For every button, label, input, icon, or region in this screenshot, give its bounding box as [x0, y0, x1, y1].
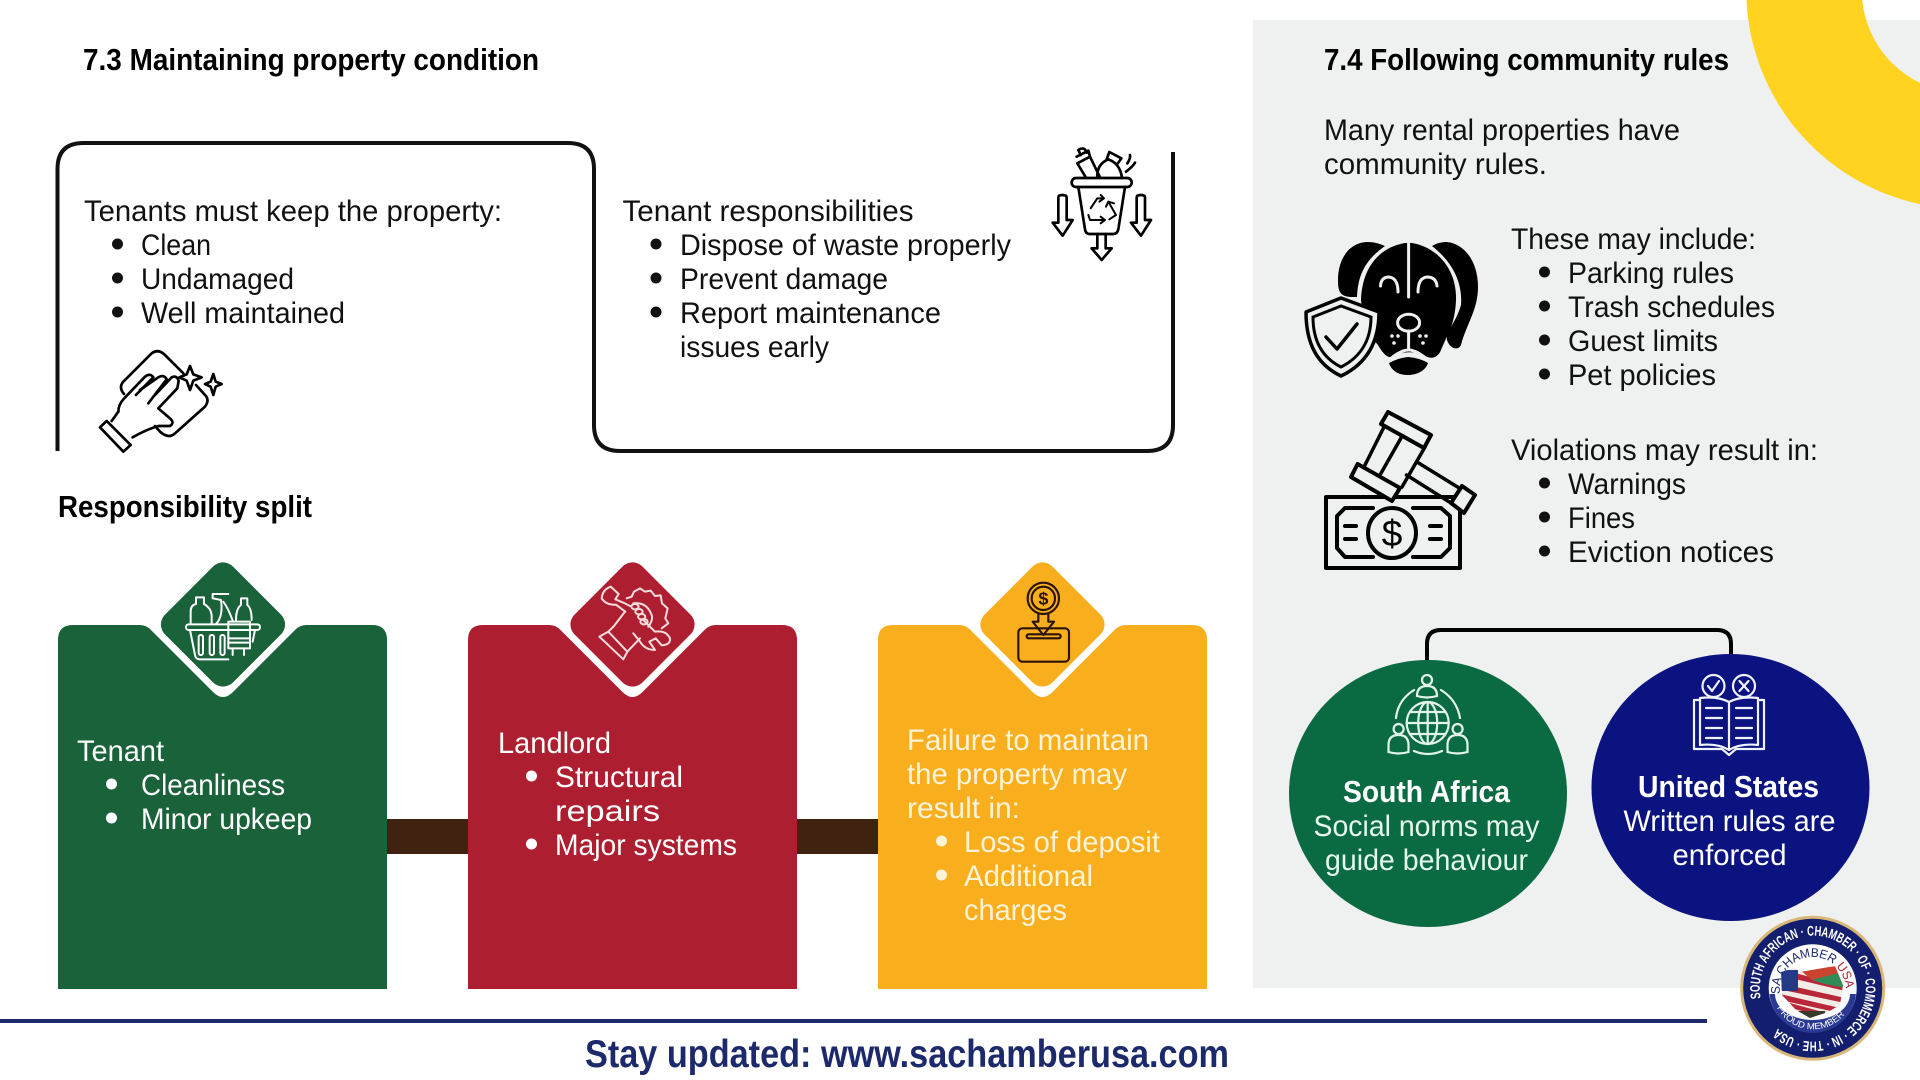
icon: hand wiping with cloth [100, 351, 222, 452]
text block: tenants must keep the property [84, 195, 502, 330]
text: United States: enforced [1672, 839, 1786, 872]
text block: tenant responsibilities: Tenant responsibilities [622, 195, 914, 228]
panel: failure to maintain card [878, 557, 1207, 989]
footer rule [0, 1019, 1707, 1023]
panel: following community rules background [1253, 20, 1920, 988]
text block: tenant responsibilities: Prevent damage [680, 263, 888, 296]
text: United States [1624, 769, 1836, 872]
text block: many rental properties: Many rental properties have [1324, 114, 1680, 147]
icon: cleaning basket [186, 594, 260, 659]
text block: many rental properties [1324, 114, 1680, 181]
text block: tenants must keep the property: Tenants must keep the property: [84, 195, 502, 228]
text block: these may include: Pet policies [1568, 359, 1716, 392]
outline: S-shaped frame around the two text blocks [58, 143, 1173, 451]
text block: these may include: These may include: [1511, 223, 1756, 256]
icon: gavel and banknote [1326, 412, 1475, 568]
heading: 7.3 Maintaining property condition: 7.3 Maintaining property condition [83, 42, 539, 77]
icon: coin dropping into box [1018, 583, 1069, 662]
decorative yellow ring [1804, 0, 1920, 151]
icon: dog with shield [1306, 242, 1478, 376]
panel: United States circle [1592, 654, 1870, 921]
panel: South Africa circle [1289, 660, 1567, 927]
panel: landlord card [468, 557, 797, 989]
footer: stay updated call to action: Stay updated: www.sachamberusa.com [585, 1033, 1229, 1076]
text: failure consequences [907, 724, 1161, 927]
icon: globe with people [1388, 675, 1468, 754]
text: failure consequences: Loss of deposit [964, 826, 1161, 859]
text block: these may include: Trash schedules [1568, 291, 1775, 324]
logo: SA Chamber USA proud member seal: SA CHAMBER USA [1771, 948, 1854, 994]
text block: tenant responsibilities: Dispose of waste properly [680, 229, 1011, 262]
text: tenant [77, 735, 312, 836]
text block: violations may result in: Violations may result in: [1511, 434, 1818, 467]
text block: tenant responsibilities [622, 195, 1011, 364]
icon: coin dropping into box: $ [1038, 589, 1048, 609]
text: tenant: Cleanliness [141, 769, 285, 802]
text: failure consequences: Failure to maintain [907, 724, 1149, 757]
text block: tenants must keep the property: Well maintained [141, 297, 345, 330]
heading: 7.4 Following community rules: 7.4 Following community rules [1324, 42, 1729, 77]
panel: tenant card [58, 557, 387, 989]
text: South Africa [1314, 774, 1540, 877]
icon: hand with wrench and gear [599, 587, 670, 659]
icon: recycling bin with arrows [1053, 148, 1151, 260]
text: landlord: Major systems [555, 829, 737, 862]
icon: gavel and banknote: $ [1382, 513, 1402, 554]
text: failure consequences: result in: [907, 792, 1020, 825]
text: failure consequences: charges [964, 894, 1067, 927]
connector: tenant to landlord [387, 819, 468, 854]
text block: these may include: Parking rules [1568, 257, 1734, 290]
logo: SA Chamber USA proud member seal: SOUTH AFRICAN · CHAMBER · OF · COMMERCE · IN · THE · USA [1750, 926, 1876, 1052]
text: South Africa: South Africa [1343, 774, 1511, 809]
text: tenant: Tenant [77, 735, 165, 768]
text block: violations may result in: Eviction notices [1568, 536, 1774, 569]
text: South Africa: Social norms may [1314, 810, 1540, 843]
connector: landlord to failure card [797, 819, 878, 854]
text: landlord [498, 727, 737, 862]
text block: these may include: Guest limits [1568, 325, 1718, 358]
text block: tenant responsibilities: issues early [680, 331, 829, 364]
text: failure consequences: Additional [964, 860, 1093, 893]
text: United States: United States [1638, 769, 1819, 804]
icon: open rule book [1694, 675, 1764, 755]
text block: violations may result in [1511, 434, 1818, 569]
text: tenant: Minor upkeep [141, 803, 312, 836]
text: landlord: Landlord [498, 727, 611, 760]
logo: SA Chamber USA proud member seal: PROUD MEMBER [1777, 1006, 1844, 1030]
text block: tenants must keep the property: Undamaged [141, 263, 294, 296]
heading: Responsibility split: Responsibility split [58, 489, 312, 524]
text: United States: Written rules are [1624, 805, 1836, 838]
text: landlord: Structural [555, 761, 683, 794]
text: failure consequences: the property may [907, 758, 1127, 791]
text: South Africa: guide behaviour [1325, 844, 1528, 877]
text block: tenants must keep the property: Clean [141, 229, 211, 262]
connector: bracket joining the two circles [1427, 630, 1731, 662]
text block: violations may result in: Fines [1568, 502, 1635, 535]
text block: tenant responsibilities: Report maintenance [680, 297, 941, 330]
text block: these may include [1511, 223, 1775, 392]
text block: many rental properties: community rules. [1324, 148, 1547, 181]
text: landlord: repairs [555, 795, 660, 828]
text block: violations may result in: Warnings [1568, 468, 1686, 501]
